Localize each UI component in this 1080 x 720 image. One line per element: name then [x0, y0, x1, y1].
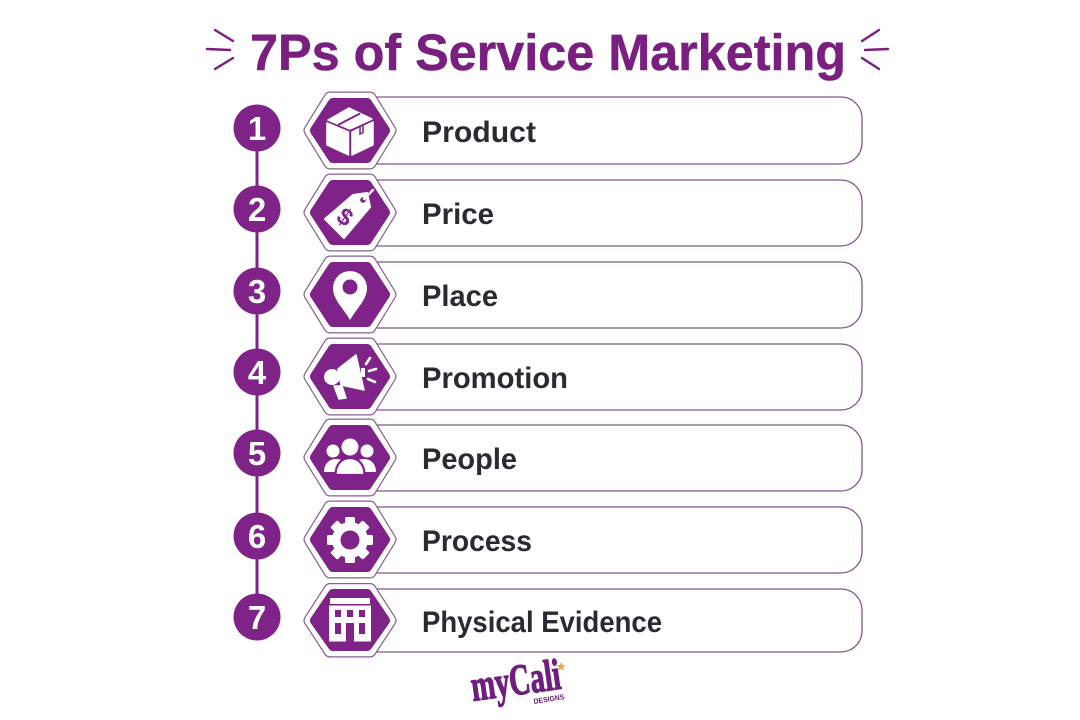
title: 7Ps of Service Marketing [250, 24, 846, 81]
hexagon: Physical Evidence [310, 590, 390, 651]
step 1: Product [234, 97, 862, 164]
number badge 2: 2 [248, 191, 266, 228]
number badge 2 [234, 186, 280, 232]
icon: box [327, 108, 373, 155]
icon: building [329, 598, 371, 642]
icon: left title sparks [207, 30, 233, 69]
label: Place: Place [422, 280, 498, 313]
hexagon: Price [310, 180, 390, 245]
label: Promotion: Promotion [422, 362, 568, 395]
number badge 4: 4 [248, 354, 267, 391]
label: Process: Process [422, 525, 532, 558]
step 5: People [234, 425, 862, 491]
icon: people group [324, 438, 376, 475]
label: Product: Product [422, 116, 536, 149]
card: People [350, 425, 862, 491]
number badge 6: 6 [248, 518, 266, 555]
step 6: Process [234, 507, 862, 573]
logo: myCali Designs: DESIGNS [533, 692, 565, 706]
timeline connector [256, 128, 258, 617]
number badge 3: 3 [248, 273, 266, 310]
icon: gear [327, 517, 373, 563]
number badge 7 [234, 594, 280, 640]
number badge 7: 7 [248, 599, 266, 636]
number badge 1: 1 [248, 110, 266, 147]
label: People: People [422, 443, 517, 476]
icon: megaphone [324, 355, 376, 399]
card: Physical Evidence [350, 589, 862, 652]
number badge 3 [234, 268, 280, 314]
number badge 5: 5 [248, 435, 266, 472]
icon: price tag [325, 190, 373, 238]
hexagon: Process [310, 507, 390, 572]
step 7: Physical Evidence [234, 589, 862, 652]
label: Price: Price [422, 198, 494, 231]
card: Process [350, 507, 862, 573]
logo: myCali Designs [468, 650, 566, 711]
step 4: Promotion [234, 344, 862, 410]
step 2: Price [234, 180, 862, 246]
card: Place [350, 262, 862, 328]
icon: map pin [333, 271, 367, 320]
logo: myCali Designs: myCali [468, 650, 564, 711]
icon: logo star [557, 662, 566, 670]
icon: right title sparks [862, 30, 888, 69]
number badge 5 [234, 430, 280, 476]
card: Promotion [350, 344, 862, 410]
step 3: Place [234, 262, 862, 328]
hexagon: Place [310, 262, 390, 327]
card: Price [350, 180, 862, 246]
label: Physical Evidence: Physical Evidence [422, 606, 662, 639]
hexagon: People [310, 425, 390, 490]
hexagon: Product [310, 98, 390, 163]
number badge 6 [234, 512, 280, 560]
hexagon: Promotion [310, 344, 390, 409]
icon: price tag: $ [331, 203, 358, 233]
number badge 4 [234, 348, 280, 396]
number badge 1 [234, 104, 280, 152]
card: Product [350, 97, 862, 164]
